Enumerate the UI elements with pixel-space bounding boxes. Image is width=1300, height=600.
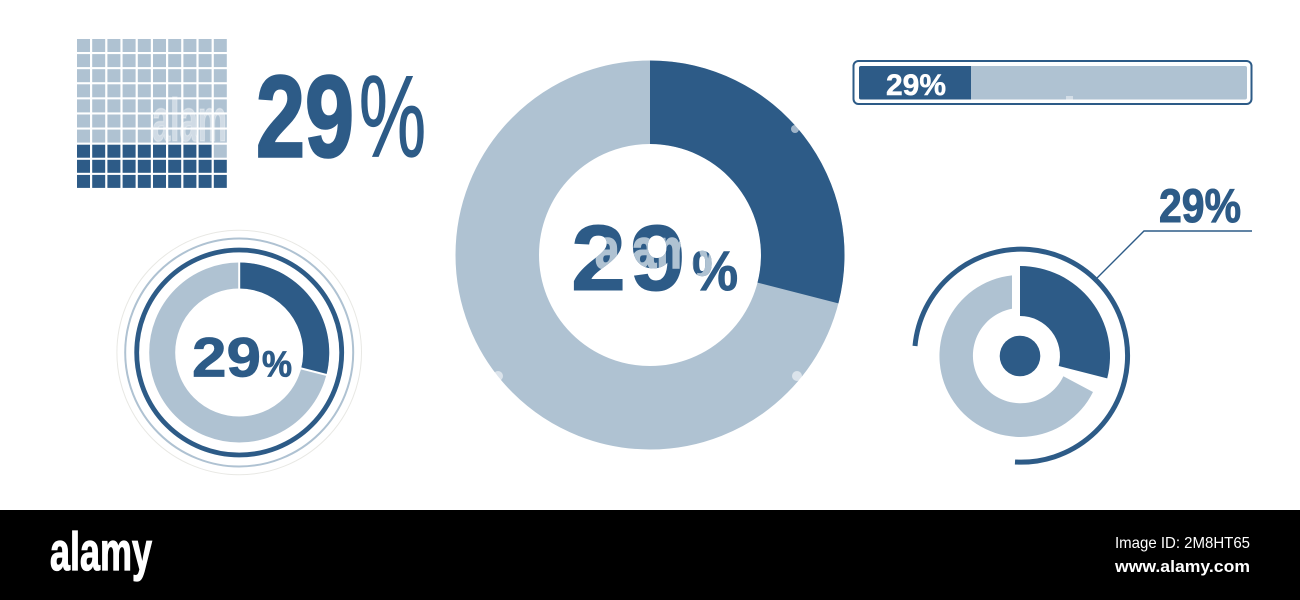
dark blue ring [137, 250, 342, 455]
centre dot [1000, 336, 1040, 376]
bar 29 percent fill [859, 66, 971, 100]
callout leader line [1097, 231, 1252, 278]
donut centre value [571, 206, 738, 310]
callout value: 29% [1159, 179, 1241, 232]
footer image id: Image ID: 2M8HT65 [1115, 535, 1250, 552]
panel: large central donut chart [493, 60, 845, 408]
donut centre value: 9 [630, 206, 685, 310]
watermark on bar edge [1066, 96, 1073, 101]
donut 29 percent segment [650, 60, 845, 303]
ring centre value: 29 [192, 326, 261, 388]
outer arc [915, 249, 1128, 462]
footer bar [0, 510, 1300, 600]
ring remainder [162, 276, 316, 430]
exploded remainder [939, 275, 1093, 437]
watermark over donut value: alamy [595, 217, 720, 280]
panel: exploded donut with callout [915, 179, 1252, 462]
panel: progress bar [854, 61, 1252, 104]
panel: concentric ring donut chart [117, 230, 362, 475]
footer url: www.alamy.com [1114, 557, 1250, 576]
bar value: 29% [886, 69, 946, 102]
bar remainder [859, 66, 1247, 100]
footer logo: alamy [50, 522, 152, 582]
watermark on waffle: alam [152, 87, 227, 154]
exploded 29 percent segment [1020, 266, 1110, 378]
waffle value label: % [359, 52, 426, 182]
watermark specks on donut [493, 125, 802, 381]
waffle grid [77, 39, 227, 188]
ring centre value [192, 326, 292, 388]
ring centre value: % [262, 344, 292, 384]
ring 29 percent segment [239, 262, 329, 375]
outer pale ring [117, 230, 362, 475]
donut remainder [497, 102, 803, 408]
segment gaps [239, 260, 330, 376]
donut centre value: % [692, 239, 738, 302]
donut centre value: 2 [571, 206, 626, 310]
light blue ring [125, 238, 353, 466]
bar frame [854, 61, 1252, 104]
panel: waffle chart with 29 percent [77, 39, 426, 188]
waffle value label: 29 [256, 52, 354, 182]
